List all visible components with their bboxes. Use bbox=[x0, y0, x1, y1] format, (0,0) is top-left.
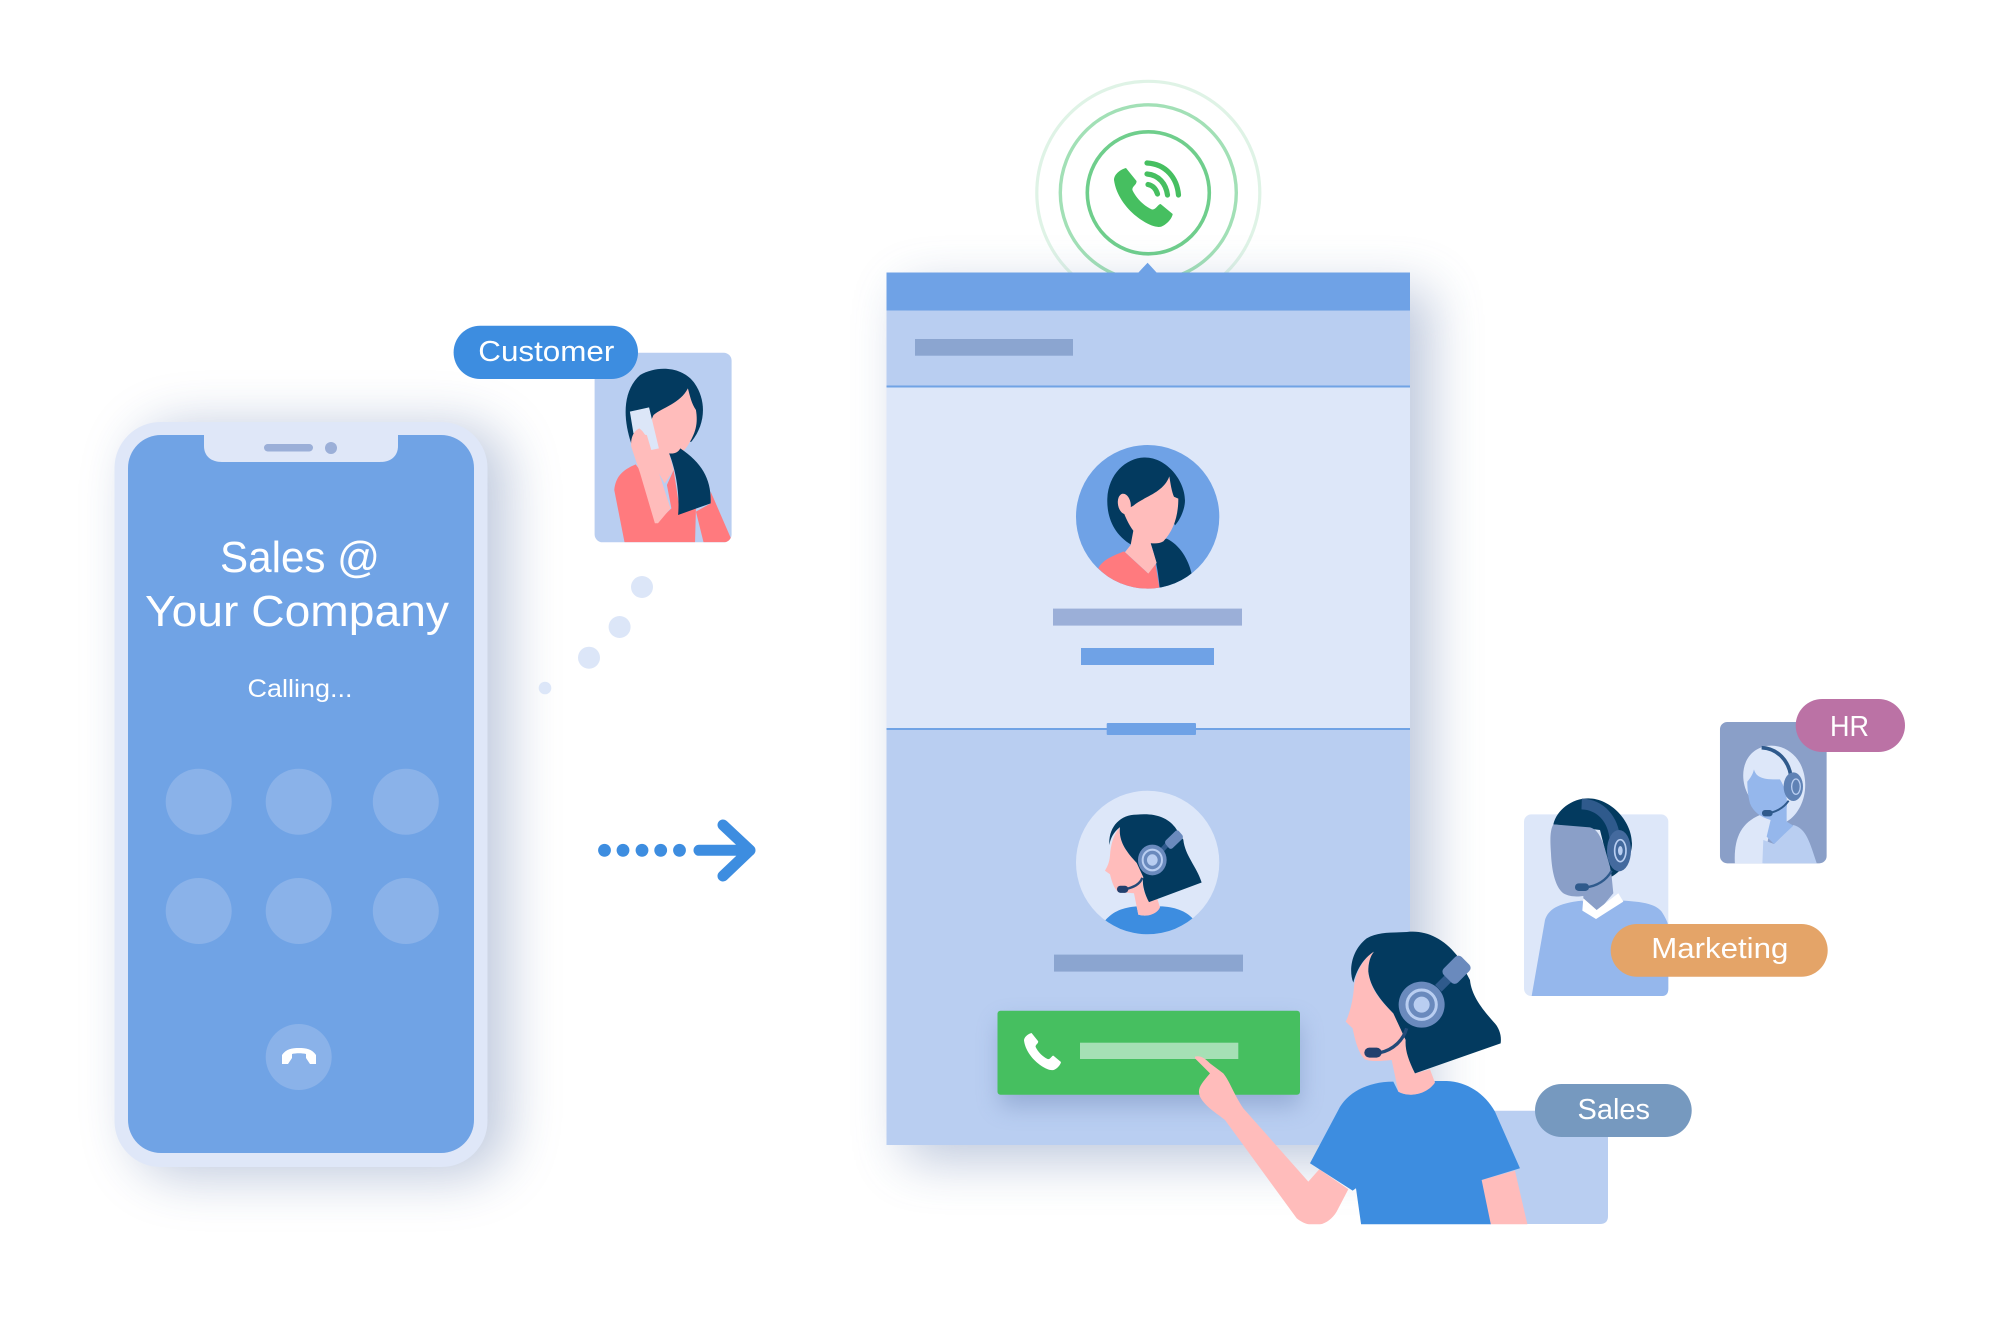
phone screen bbox=[128, 435, 474, 1153]
address placeholder bbox=[915, 339, 1073, 356]
phone notch bbox=[204, 432, 398, 462]
label: Marketing bbox=[1611, 924, 1828, 977]
agent name bar bbox=[1054, 955, 1243, 972]
marketing collar bbox=[1582, 893, 1623, 919]
HR left shoulder bbox=[1735, 815, 1772, 865]
label: Customer bbox=[454, 326, 638, 379]
marketing face bbox=[1550, 824, 1613, 913]
HR hair bbox=[1743, 746, 1805, 822]
label: Sales bbox=[1535, 1084, 1692, 1137]
label: HR bbox=[1796, 699, 1905, 752]
agent avatar bbox=[1076, 791, 1219, 936]
label: HR: HR bbox=[1830, 711, 1869, 743]
panel: call screen bbox=[886, 263, 1430, 1160]
customer card with figure bbox=[595, 353, 732, 542]
customer shirt bbox=[614, 464, 732, 542]
answer button bbox=[998, 1011, 1300, 1106]
arrow: dotted flow to panel bbox=[598, 825, 750, 876]
panel top bar bbox=[886, 272, 1410, 311]
label: Sales: Sales bbox=[1578, 1094, 1650, 1126]
caller avatar bbox=[1076, 445, 1219, 591]
signal waves bbox=[1147, 163, 1178, 195]
marketing agent card bbox=[1524, 798, 1668, 996]
phone title: Sales @ bbox=[220, 533, 380, 582]
phone speaker bbox=[264, 444, 313, 452]
agent arm bbox=[1195, 1056, 1348, 1225]
agent back card bbox=[1450, 1111, 1608, 1224]
phone keypad bbox=[166, 769, 439, 944]
phone: caller handset bbox=[114, 422, 508, 1177]
phone title: Your Company bbox=[145, 587, 449, 636]
panel pointer bbox=[1138, 263, 1157, 273]
customer face bbox=[642, 388, 697, 483]
handset glyph bbox=[1114, 168, 1173, 227]
label: Customer: Customer bbox=[478, 336, 615, 368]
HR face bbox=[1747, 769, 1793, 844]
customer handset bbox=[630, 407, 659, 450]
icon: ringing phone with pulses bbox=[1037, 81, 1260, 304]
customer arm bbox=[631, 428, 670, 523]
caller name bar bbox=[1053, 609, 1242, 626]
HR shirt bbox=[1762, 825, 1817, 865]
marketing headset bbox=[1575, 804, 1631, 891]
label: Marketing: Marketing bbox=[1651, 933, 1788, 965]
agent hair bbox=[1351, 932, 1501, 1073]
agent shirt bbox=[1310, 1081, 1520, 1228]
caller number bar bbox=[1081, 648, 1214, 665]
phone body bbox=[114, 422, 488, 1167]
agent face and neck bbox=[1346, 952, 1435, 1095]
agent figure bbox=[1195, 932, 1528, 1228]
marketing hair bbox=[1553, 798, 1632, 877]
customer ponytail bbox=[669, 448, 711, 515]
phone status text: Calling... bbox=[248, 675, 352, 703]
HR headset bbox=[1762, 748, 1803, 816]
agent headset bbox=[1364, 954, 1473, 1058]
phone camera bbox=[325, 442, 337, 454]
phone end-call button bbox=[266, 1024, 332, 1090]
marketing sweater bbox=[1532, 901, 1668, 996]
panel agent section bbox=[886, 729, 1410, 1145]
customer hair bbox=[626, 369, 703, 447]
panel caller section bbox=[886, 386, 1410, 729]
agent right arm bbox=[1482, 1171, 1528, 1228]
phone title bbox=[145, 533, 449, 636]
section tab bbox=[1107, 723, 1196, 735]
HR agent card bbox=[1720, 722, 1827, 865]
panel address section bbox=[886, 311, 1410, 387]
thought dots bbox=[539, 576, 653, 694]
